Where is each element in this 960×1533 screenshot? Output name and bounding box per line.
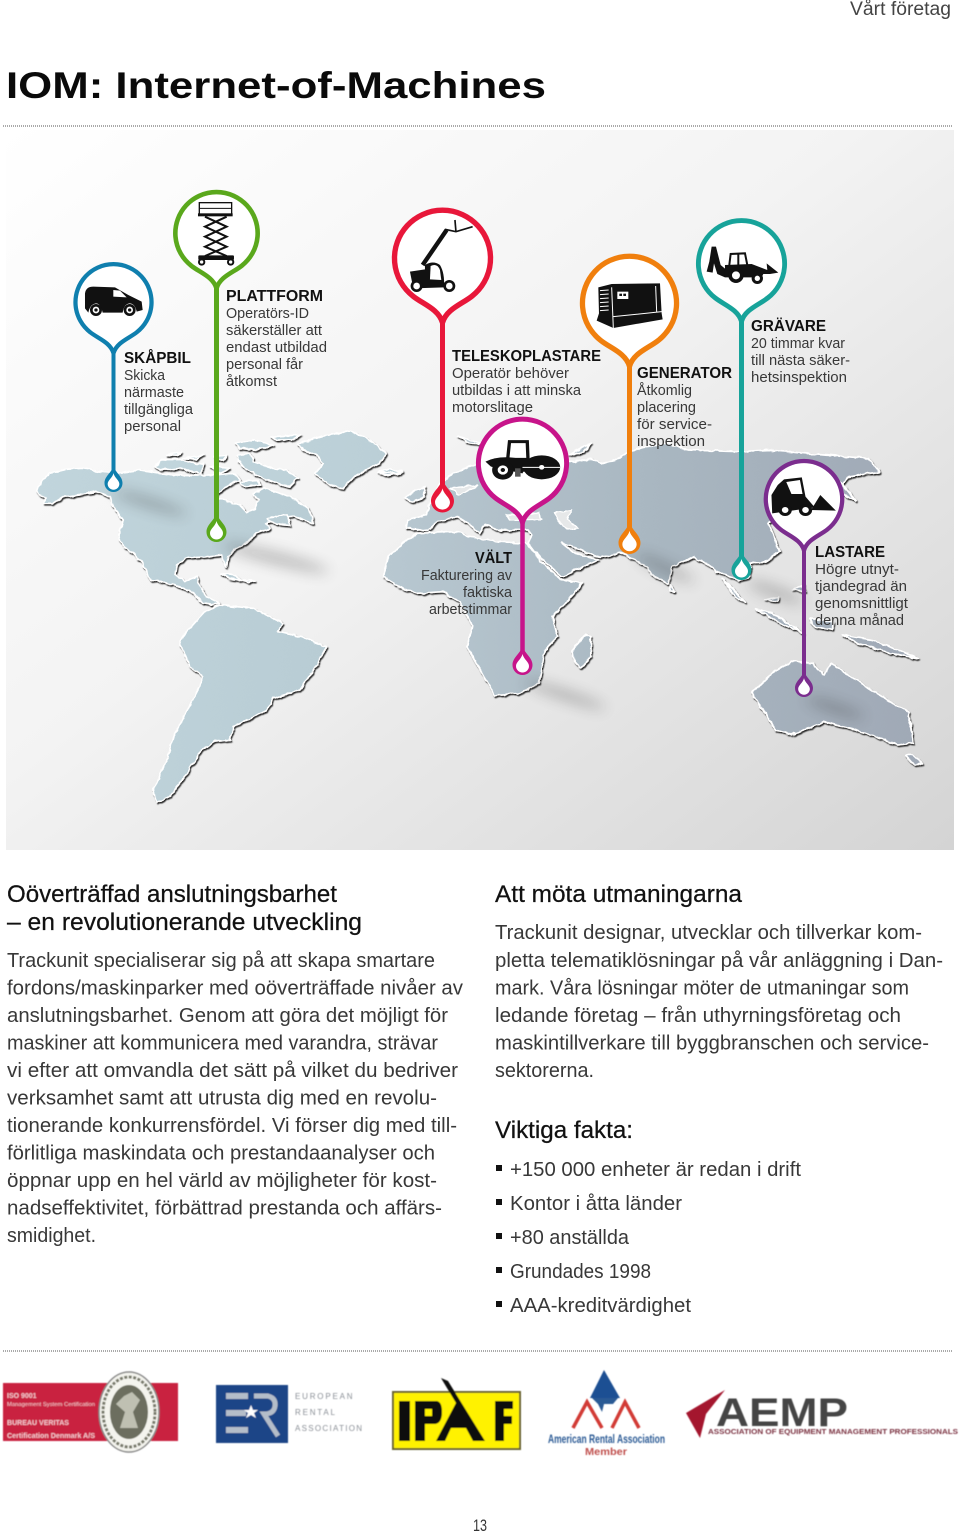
logo: American Rental Association [548,1370,665,1458]
icon: skid steer [771,477,836,516]
map: Arctic Canada, Greenland and Iceland [155,431,402,488]
text block: left column body: smidighet. [7,1225,96,1247]
icon: scissor lift [198,203,234,266]
label: Generator [637,365,732,450]
label: Vält: arbetstimmar [429,601,512,618]
pin: Teleskoplastare (red) [394,210,491,512]
icon: generator [597,283,663,328]
text block: right column body: ledande företag – från uthyrningsföretag och [495,1005,901,1027]
text block: left column body: förlitliga maskindata och prestandaanalyser och [7,1142,435,1164]
pin: Lastare (purple) [766,461,842,697]
label: Lastare: Högre utnyt- [815,561,899,578]
text block: left column body: vi efter att omvandla det sätt på vilket du bedriver [7,1060,458,1082]
icon: van [85,287,143,316]
label: Plattform: endast utbildad [226,339,327,356]
label: Teleskoplastare: motorslitage [452,399,533,416]
label: Skåpbil: tillgängliga [124,401,194,418]
list: key facts: +80 anställda [510,1227,630,1249]
label: Teleskoplastare [452,348,601,416]
heading: Viktiga fakta: Viktiga fakta: [495,1117,633,1144]
logo: European Rental Association: ASSOCIATION [295,1424,363,1433]
label: Vält: faktiska [463,584,513,601]
list: key facts: +150 000 enheter är redan i drift [510,1159,801,1181]
logo: European Rental Association [216,1385,363,1443]
panel: world map with machine pins [6,130,954,850]
logo: AEMP: AEMP [716,1391,848,1435]
icon: telehandler [410,220,473,292]
text block: left column body: öppnar upp en hel värld av möjligheter för kost- [7,1170,437,1192]
pin: Generator (orange) [582,256,677,554]
label: Lastare [815,544,909,629]
text block: left column body: nadseffektivitet, förbättrad prestanda och affärs- [7,1198,442,1220]
logo: Bureau Veritas: ISO 9001 [7,1393,37,1400]
text block: left column body: tionerande konkurrensfördel. Vi förser dig med till- [7,1115,457,1137]
text block: right column body: sektorerna. [495,1060,594,1082]
text block: left column body: fordons/maskinparker med oöverträffade nivåer av [7,978,463,1000]
label: Grävare: till nästa säker- [751,352,850,369]
label: Generator: inspektion [637,433,705,450]
heading: Oöverträffad anslutningsbarhet: Oöverträffad anslutningsbarhet [7,881,337,908]
label: Generator: för service- [637,416,712,433]
label: Skåpbil: SKÅPBIL [124,350,191,367]
logo: European Rental Association: EUROPEAN [295,1392,354,1401]
text block: right column body: Trackunit designar, utvecklar och tillverkar kom- [495,922,922,944]
label: Vält [421,550,513,618]
label: Skåpbil: Skicka [124,367,166,384]
logo: Bureau Veritas: BUREAU VERITAS [7,1420,69,1427]
label: Lastare: genomsnittligt [815,595,909,612]
label: Grävare: GRÄVARE [751,318,826,335]
label: Teleskoplastare: TELESKOPLASTARE [452,348,601,365]
icon: road roller [485,442,560,480]
map: Americas [37,468,327,803]
list: key facts [496,1159,801,1317]
text block: right column body: pletta telematiklösningar på vår anläggning i Dan- [495,950,943,972]
label: Plattform: säkerställer att [226,322,323,339]
text block: left column body: verksamhet samt att utrusta dig med en revolu- [7,1088,437,1110]
label: Generator: Åtkomlig [637,382,692,399]
list: key facts: Grundades 1998 [510,1261,651,1283]
pin: Plattform (green) [175,192,258,542]
text block: right column body: maskintillverkare till byggbranschen och service- [495,1032,929,1054]
pin cast shadows [112,487,865,722]
logo: Bureau Veritas [3,1372,178,1452]
text block: right column body [495,922,943,1082]
label: Lastare: tjandegrad än [815,578,907,595]
list: key facts: AAA-kreditvärdighet [510,1295,691,1317]
map: Eurasia, Africa, Oceania [380,437,922,765]
label: Vält: VÄLT [475,550,512,567]
label: Skåpbil: personal [124,418,181,435]
logo: AEMP [686,1390,958,1438]
logo: AEMP: ASSOCIATION OF EQUIPMENT MANAGEMENT PROFESSIONALS [708,1429,958,1436]
label: Plattform: PLATTFORM [226,288,323,305]
text block: left column body: maskiner att kommunicera med varandra, strävar [7,1032,438,1054]
logo: Bureau Veritas: Management System Certification [7,1402,95,1408]
panel background [6,130,954,850]
logo: Bureau Veritas: Certification Denmark A/S [7,1433,95,1440]
text block: left column body [7,950,463,1247]
text block: right column body: mark. Våra lösningar möter de utmaningar som [495,978,909,1000]
label: Grävare: hetsinspektion [751,369,847,386]
icon: backhoe [707,247,778,284]
title: IOM: Internet-of-Machines [6,65,546,106]
text block: left column body: anslutningsbarhet. Genom att göra det möjligt för [7,1005,448,1027]
label: Teleskoplastare: utbildas i att minska [452,382,582,399]
label: Grävare: 20 timmar kvar [751,335,845,352]
label: Generator: placering [637,399,696,416]
text block: left column body: Trackunit specialiserar sig på att skapa smartare [7,950,435,972]
label: Plattform: Operatörs-ID [226,305,309,322]
logo: American Rental Association: American Rental Association [548,1432,665,1446]
label: Teleskoplastare: Operatör behöver [452,365,569,382]
logo: IPAF [393,1378,520,1449]
label: Plattform: personal får [226,356,303,373]
label: Generator: GENERATOR [637,365,732,382]
logo: European Rental Association: RENTAL [295,1408,337,1417]
label: Vält: Fakturering av [421,567,512,584]
logo: American Rental Association: Member [585,1447,627,1458]
heading: Att möta utmaningarna: Att möta utmaningarna [495,881,743,908]
label: Skåpbil: närmaste [124,384,184,401]
pin: Grävare (teal) [698,221,785,580]
label: Grävare [751,318,850,386]
pin: Vält (magenta) [478,419,567,675]
pin: Skåpbil (blue) [75,264,152,492]
label: Lastare: denna månad [815,612,904,629]
label: Plattform: åtkomst [226,373,278,390]
heading: Oöverträffad anslutningsbarhet: – en revolutionerande utveckling [7,909,362,936]
label: Lastare: LASTARE [815,544,885,561]
map: world continents [37,431,922,803]
heading: Oöverträffad anslutningsbarhet [7,881,362,936]
label: Plattform [226,288,327,390]
list: key facts: Kontor i åtta länder [510,1193,682,1215]
label: Skåpbil [124,350,194,435]
